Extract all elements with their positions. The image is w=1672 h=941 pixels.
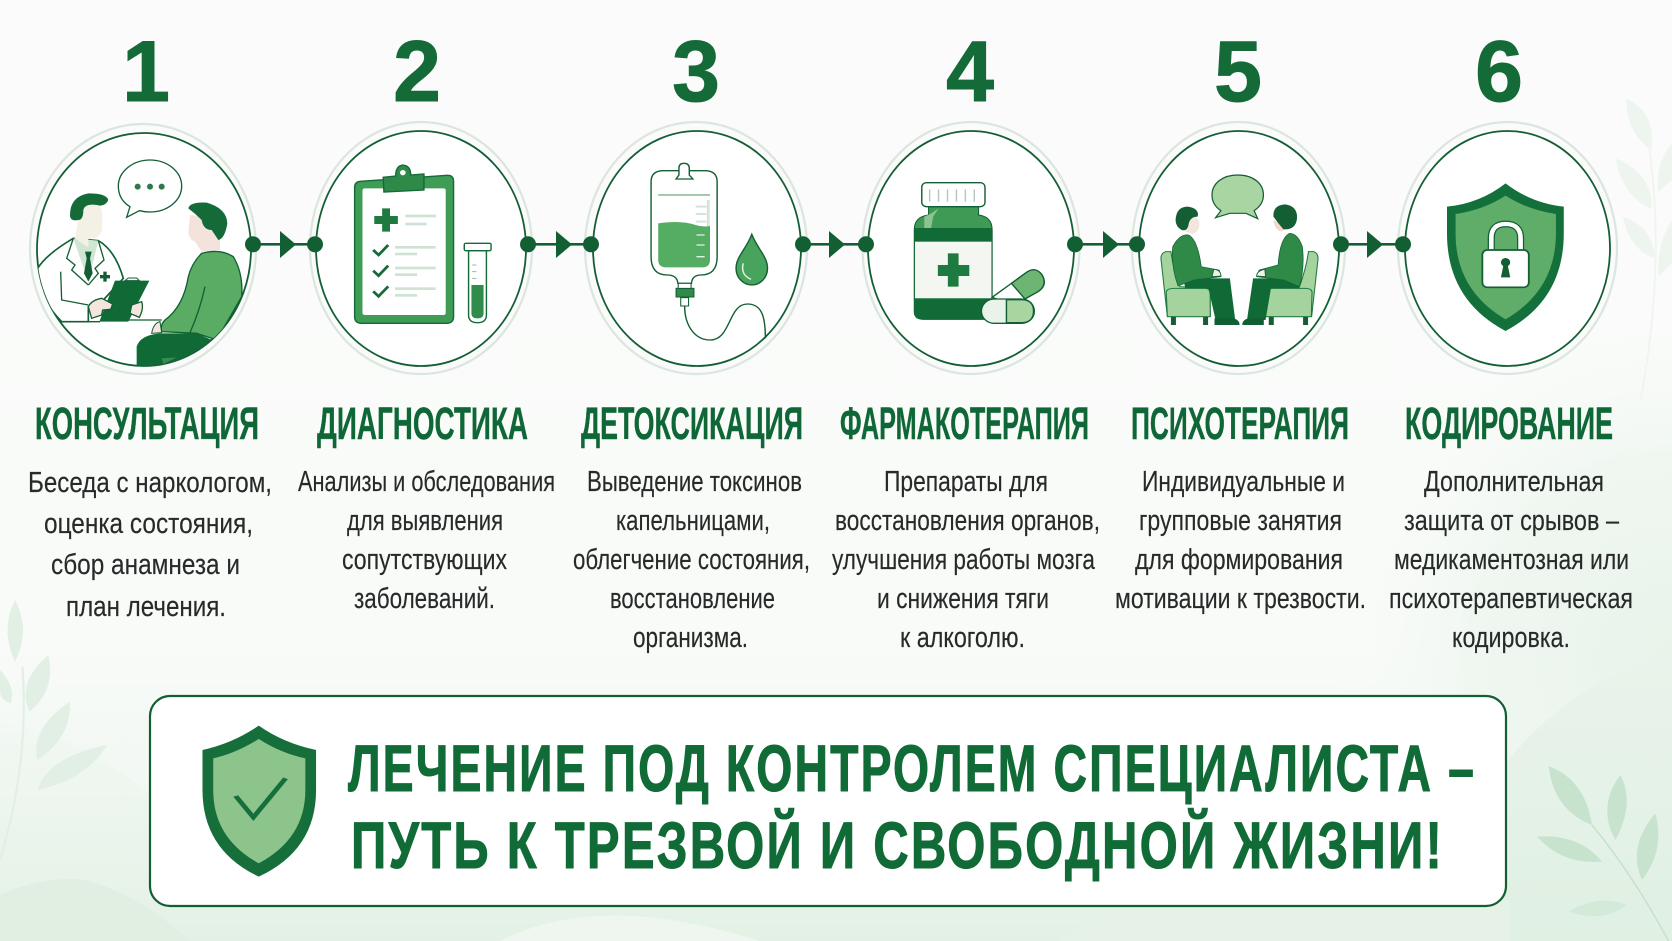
description: кодировка. — [1452, 622, 1570, 654]
description — [28, 467, 272, 623]
step 5: psychotherapy — [1115, 24, 1366, 615]
description — [573, 466, 810, 654]
description: улучшения работы мозга — [832, 544, 1096, 576]
icon: doctor and patient — [30, 124, 256, 374]
icon: two people in armchairs talking — [1132, 122, 1345, 374]
description: Дополнительная — [1424, 466, 1604, 498]
description: для формирования — [1135, 544, 1343, 576]
heading: ДЕТОКСИКАЦИЯ — [581, 398, 803, 449]
description: организма. — [633, 622, 748, 654]
decorative leaves: lower right — [1537, 766, 1669, 941]
step 6: coding — [1389, 24, 1633, 654]
icon: shield with padlock — [1398, 122, 1617, 374]
description: план лечения. — [66, 591, 226, 623]
icon: shield with check mark — [202, 726, 316, 877]
description: сбор анамнеза и — [51, 549, 240, 581]
heading: ДИАГНОСТИКА — [317, 398, 528, 449]
number 1: 1 — [122, 24, 170, 120]
description: и снижения тяги — [877, 583, 1049, 615]
description: сопутствующих — [342, 544, 507, 576]
heading: КОНСУЛЬТАЦИЯ — [35, 398, 259, 449]
description: заболеваний. — [354, 583, 495, 615]
description: групповые занятия — [1139, 505, 1342, 537]
description: облегчение состояния, — [573, 544, 810, 576]
description: Индивидуальные и — [1142, 466, 1345, 498]
description: к алкоголю. — [900, 622, 1025, 654]
icon: IV drip bag — [585, 122, 807, 374]
description — [298, 466, 555, 615]
description: Выведение токсинов — [587, 466, 802, 498]
description — [1389, 466, 1633, 654]
heading: ПСИХОТЕРАПИЯ — [1131, 398, 1349, 449]
connector arrows — [245, 231, 1411, 258]
number 5: 5 — [1214, 24, 1262, 120]
description: защита от срывов – — [1404, 505, 1620, 537]
bottom banner — [150, 696, 1506, 906]
number 4: 4 — [946, 24, 994, 120]
step 4: pharmacotherapy — [832, 24, 1100, 654]
number 3: 3 — [672, 24, 720, 120]
description: Анализы и обследования — [298, 466, 555, 498]
heading: ФАРМАКОТЕРАПИЯ — [840, 398, 1089, 449]
step 2: diagnostics — [298, 24, 555, 615]
description: мотивации к трезвости. — [1115, 583, 1366, 615]
description: оценка состояния, — [44, 508, 253, 540]
decorative leaves: upper right — [1616, 98, 1672, 400]
icon: clipboard and test tube — [310, 122, 532, 374]
description — [1115, 466, 1366, 615]
description: восстановление — [610, 583, 775, 615]
description: Препараты для — [884, 466, 1048, 498]
description: капельницами, — [616, 505, 770, 537]
icon: pill bottle and capsules — [862, 122, 1080, 374]
step 1: consultation — [28, 24, 272, 623]
description: для выявления — [347, 505, 503, 537]
number 2: 2 — [393, 24, 441, 120]
banner headline — [348, 731, 1476, 882]
description: восстановления органов, — [835, 505, 1100, 537]
banner box — [150, 696, 1506, 906]
number 6: 6 — [1475, 24, 1523, 120]
description: Беседа с наркологом, — [28, 467, 272, 499]
step 3: detox — [573, 24, 810, 654]
decorative leaves: left — [0, 600, 107, 860]
description — [832, 466, 1100, 654]
